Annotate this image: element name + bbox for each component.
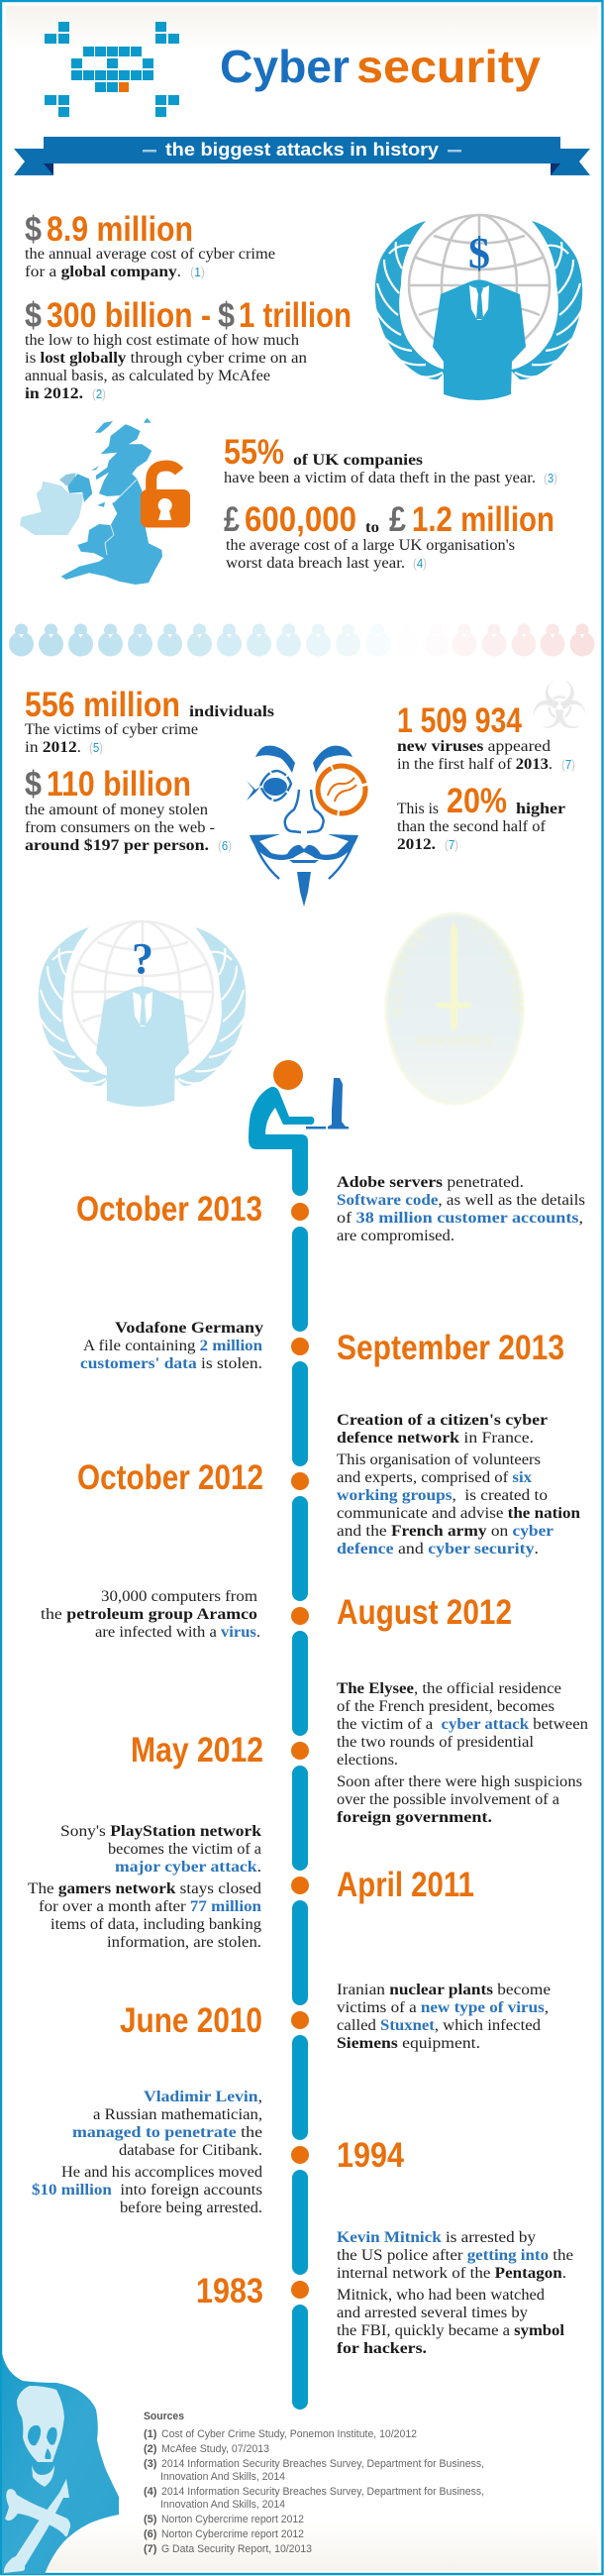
stat: $8.9 million: (1) <box>190 265 205 279</box>
event: October 2012: defence and cyber security . <box>337 1541 539 1557</box>
event: 1983: the US police after getting into the <box>337 2247 573 2264</box>
event: May 2012: the victim of a cyber attack between <box>337 1716 588 1733</box>
badge: reserve citoyenne <box>384 912 525 1106</box>
stat: $110 billion: around $197 per person. <box>25 837 209 854</box>
event: April 2011: becomes the victim of a <box>108 1841 261 1858</box>
event: October 2012: This organisation of volunteers <box>337 1451 541 1468</box>
stat: 20% higher: than the second half of <box>397 818 547 835</box>
event: May 2012 <box>131 1680 588 1826</box>
event: September 2013: September 2013 <box>337 1329 564 1367</box>
event: 1983: Kevin Mitnick is arrested by <box>337 2229 536 2246</box>
event: April 2011: Sony's PlayStation network <box>60 1823 261 1840</box>
stat: $110 billion <box>25 765 232 854</box>
event: 1983 <box>196 2229 573 2357</box>
sources: G Data Security Report, 10/2013 <box>161 2543 312 2555</box>
event: 1983: for hackers. <box>337 2340 427 2357</box>
event: September 2013: A file containing 2 million <box>83 1338 262 1354</box>
title: security <box>356 41 541 92</box>
stat: 556 million individuals: in 2012. <box>25 739 81 756</box>
badge: reserve citoyenne: RESERVE <box>391 929 428 1017</box>
sources: (4) <box>144 2486 157 2498</box>
event: May 2012: foreign government. <box>337 1809 492 1826</box>
stat: 556 million individuals: 556 million <box>25 686 180 724</box>
stat: $110 billion: from consumers on the web - <box>25 819 215 836</box>
stat: 55% of UK companies <box>224 433 557 486</box>
event: August 2012: are infected with a virus. <box>95 1624 260 1641</box>
stat: 556 million individuals: The victims of cyber crime <box>25 721 198 738</box>
stat: 1 509 934 new viruses: (7) <box>561 757 575 772</box>
sources: Innovation And Skills, 2014 <box>160 2471 285 2483</box>
stat: $300 billion - $1 trillion: 1 trillion <box>239 296 352 335</box>
event: October 2013: of 38 million customer accounts , <box>337 1210 583 1227</box>
map: UK and Ireland with open padlock <box>20 418 190 585</box>
timeline spine <box>291 1203 309 2410</box>
event: October 2013: Adobe servers penetrated. <box>337 1174 524 1191</box>
event: October 2012: Creation of a citizen's cyber <box>337 1412 548 1429</box>
stat: $300 billion - $1 trillion: is lost globally through cyber crime on an <box>25 350 307 367</box>
event: October 2013 <box>76 1174 585 1244</box>
stat: £600,000 to £1.2 million: to <box>365 519 379 536</box>
sources: (6) <box>144 2528 157 2540</box>
event: August 2012: the petroleum group Aramco <box>41 1606 257 1623</box>
sources: McAfee Study, 07/2013 <box>161 2443 269 2455</box>
stat: £600,000 to £1.2 million: 600,000 <box>245 500 356 539</box>
stat: $300 billion - $1 trillion: annual basis, as calculated by McAfee <box>25 368 270 384</box>
event: 1994: Vladimir Levin , <box>144 2089 262 2105</box>
event: 1983: and arrested several times by <box>337 2305 528 2321</box>
event: May 2012: elections. <box>337 1752 398 1769</box>
event: 1994: before being arrested. <box>120 2200 262 2216</box>
stat: £600,000 to £1.2 million: £ <box>389 500 406 539</box>
sources: Innovation And Skills, 2014 <box>160 2499 285 2511</box>
event: October 2012 <box>77 1412 580 1557</box>
event: October 2012: and the French army on cyber <box>337 1523 554 1540</box>
event: October 2013: Software code , as well as the details <box>337 1192 585 1209</box>
stat: $8.9 million <box>25 210 275 280</box>
event: May 2012: May 2012 <box>131 1731 263 1770</box>
sources: Norton Cybercrime report 2012 <box>161 2528 304 2540</box>
sources: Norton Cybercrime report 2012 <box>161 2514 304 2525</box>
icon: biohazard: ☣ <box>530 668 589 744</box>
stat: $300 billion - $1 trillion: (2) <box>92 386 106 401</box>
event: April 2011: for over a month after 77 million <box>39 1898 261 1915</box>
stat: 20% higher: This is <box>397 801 439 817</box>
stat: $8.9 million: 8.9 million <box>47 210 193 249</box>
stat: $110 billion: the amount of money stolen <box>25 802 208 818</box>
stat: £600,000 to £1.2 million: (4) <box>413 556 427 571</box>
stat: $300 billion - $1 trillion: $ <box>218 296 235 335</box>
event: October 2012: and experts, comprised of six <box>337 1469 532 1486</box>
banner: the biggest attacks in history: the biggest attacks in history <box>165 140 439 160</box>
event: September 2013 <box>80 1320 564 1372</box>
title: Cyber <box>220 41 350 92</box>
sources: 2014 Information Security Breaches Survey, Department for Business, <box>161 2486 484 2498</box>
emblem: anonymous suit with dollar <box>375 215 582 400</box>
event: October 2013: are compromised. <box>337 1228 454 1244</box>
event: May 2012: The Elysee, the official residence <box>337 1680 561 1697</box>
stat: 20% higher <box>397 782 565 853</box>
stat: 20% higher: (7) <box>445 837 458 852</box>
sources: Sources <box>144 2411 184 2422</box>
event: June 2010: Siemens equipment. <box>337 2035 480 2052</box>
event: September 2013: customers' data is stolen. <box>80 1355 262 1372</box>
event: 1994 <box>32 2089 404 2216</box>
event: October 2012: defence network in France. <box>337 1430 534 1447</box>
stat: 55% of UK companies: of UK companies <box>293 452 423 469</box>
sources: 2014 Information Security Breaches Survey, Department for Business, <box>161 2458 484 2470</box>
stat: $8.9 million: for a global company . <box>25 264 181 280</box>
event: 1983: 1983 <box>196 2272 263 2310</box>
badge: reserve citoyenne: CITOYENNE <box>471 921 524 1015</box>
event: 1994: database for Citibank. <box>119 2142 262 2159</box>
emblem: anonymous suit with dollar: $ <box>468 229 490 277</box>
stat: $110 billion: (6) <box>218 838 232 853</box>
event: June 2010: June 2010 <box>120 2001 262 2040</box>
stat: 20% higher: 20% <box>447 782 507 820</box>
banner: the biggest attacks in history <box>14 137 590 175</box>
stat: $110 billion: 110 billion <box>47 765 191 804</box>
stat: 1 509 934 new viruses: in the first half of 2013. <box>397 756 553 773</box>
stat: $300 billion - $1 trillion: $ <box>25 296 42 335</box>
emblem: faded anonymous with question mark: ? <box>132 934 153 983</box>
stat: $300 billion - $1 trillion: in 2012. <box>25 385 83 402</box>
event: June 2010: Iranian nuclear plants become <box>337 1982 551 1998</box>
event: April 2011: information, are stolen. <box>107 1934 261 1951</box>
event: August 2012: August 2012 <box>337 1593 512 1632</box>
event: May 2012: of the French president, becomes <box>337 1698 554 1715</box>
stat: $300 billion - $1 trillion <box>25 296 352 402</box>
event: October 2012: communicate and advise the nation <box>337 1505 580 1522</box>
stat: $300 billion - $1 trillion: the low to high cost estimate of how much <box>25 332 299 349</box>
event: 1994: a Russian mathematician, <box>93 2106 262 2123</box>
stat: £600,000 to £1.2 million: worst data breach last year. <box>226 555 405 572</box>
event: August 2012 <box>41 1588 512 1641</box>
event: 1994: managed to penetrate the <box>72 2124 262 2141</box>
event: September 2013: Vodafone Germany <box>115 1320 263 1337</box>
icon: pirate flag <box>2 2353 119 2574</box>
event: May 2012: Soon after there were high suspicions <box>337 1773 582 1790</box>
stat: 556 million individuals <box>25 686 274 756</box>
sources: (2) <box>144 2443 157 2455</box>
event: April 2011: items of data, including banking <box>50 1916 261 1933</box>
event: April 2011: April 2011 <box>337 1866 474 1904</box>
stat: £600,000 to £1.2 million: £ <box>224 500 240 539</box>
stat: 55% of UK companies: 55% <box>224 433 284 472</box>
event: October 2012: October 2012 <box>77 1458 263 1497</box>
stat: 1 509 934 new viruses: 1 509 934 <box>397 701 522 740</box>
badge: reserve citoyenne: AD HONORES <box>416 1032 492 1048</box>
stat: £600,000 to £1.2 million: the average cost of a large UK organisation's <box>226 537 515 554</box>
stat: $8.9 million: the annual average cost of cyber crime <box>25 246 275 263</box>
stat: 20% higher: 2012. <box>397 836 436 853</box>
stat: $300 billion - $1 trillion: 300 billion - <box>47 296 211 335</box>
icon: pixel skull logo <box>45 22 179 117</box>
stat: 55% of UK companies: (3) <box>544 471 557 485</box>
stat: $8.9 million: $ <box>25 210 42 249</box>
event: May 2012: the two rounds of presidential <box>337 1734 535 1751</box>
stat: £600,000 to £1.2 million <box>224 500 554 572</box>
figure: hacker at computer <box>249 1060 349 1196</box>
event: June 2010: called Stuxnet, which infected <box>337 2017 541 2034</box>
stat: £600,000 to £1.2 million: 1.2 million <box>412 500 554 539</box>
event: October 2013: October 2013 <box>76 1190 262 1229</box>
event: April 2011: The gamers network stays closed <box>28 1880 261 1897</box>
stat: 20% higher: higher <box>516 801 565 817</box>
event: 1994: $10 million into foreign accounts <box>32 2182 262 2199</box>
event: June 2010 <box>120 1982 551 2052</box>
event: April 2011: major cyber attack . <box>115 1859 261 1876</box>
event: 1983: the FBI, quickly became a symbol <box>337 2322 565 2339</box>
stat: 1 509 934 new viruses: new viruses appeared <box>397 738 551 755</box>
stat: 556 million individuals: individuals <box>189 703 274 720</box>
event: October 2012: working groups , is created to <box>337 1487 548 1504</box>
stat: 1 509 934 new viruses <box>397 701 575 773</box>
event: 1983: internal network of the Pentagon . <box>337 2265 566 2282</box>
event: April 2011 <box>28 1823 474 1951</box>
event: May 2012: over the possible involvement of a <box>337 1791 559 1808</box>
icon: guy fawkes mask <box>247 746 365 907</box>
event: 1994: 1994 <box>337 2136 404 2175</box>
sources: Cost of Cyber Crime Study, Ponemon Institute, 10/2012 <box>161 2428 417 2440</box>
sources: (3) <box>144 2458 157 2470</box>
stat: $110 billion: $ <box>25 765 42 804</box>
event: 1983: Mitnick, who had been watched <box>337 2287 545 2304</box>
stat: 556 million individuals: (5) <box>89 740 103 755</box>
people row <box>9 624 594 656</box>
emblem: faded anonymous with question mark <box>39 921 246 1107</box>
stat: 55% of UK companies: have been a victim of data theft in the past year. <box>224 470 536 486</box>
sources <box>144 2411 484 2555</box>
sources: (5) <box>144 2514 157 2525</box>
sources: (7) <box>144 2543 157 2555</box>
sources: (1) <box>144 2428 157 2440</box>
event: 1994: He and his accomplices moved <box>61 2164 262 2181</box>
event: August 2012: 30,000 computers from <box>101 1588 258 1605</box>
event: June 2010: victims of a new type of virus , <box>337 1999 549 2016</box>
